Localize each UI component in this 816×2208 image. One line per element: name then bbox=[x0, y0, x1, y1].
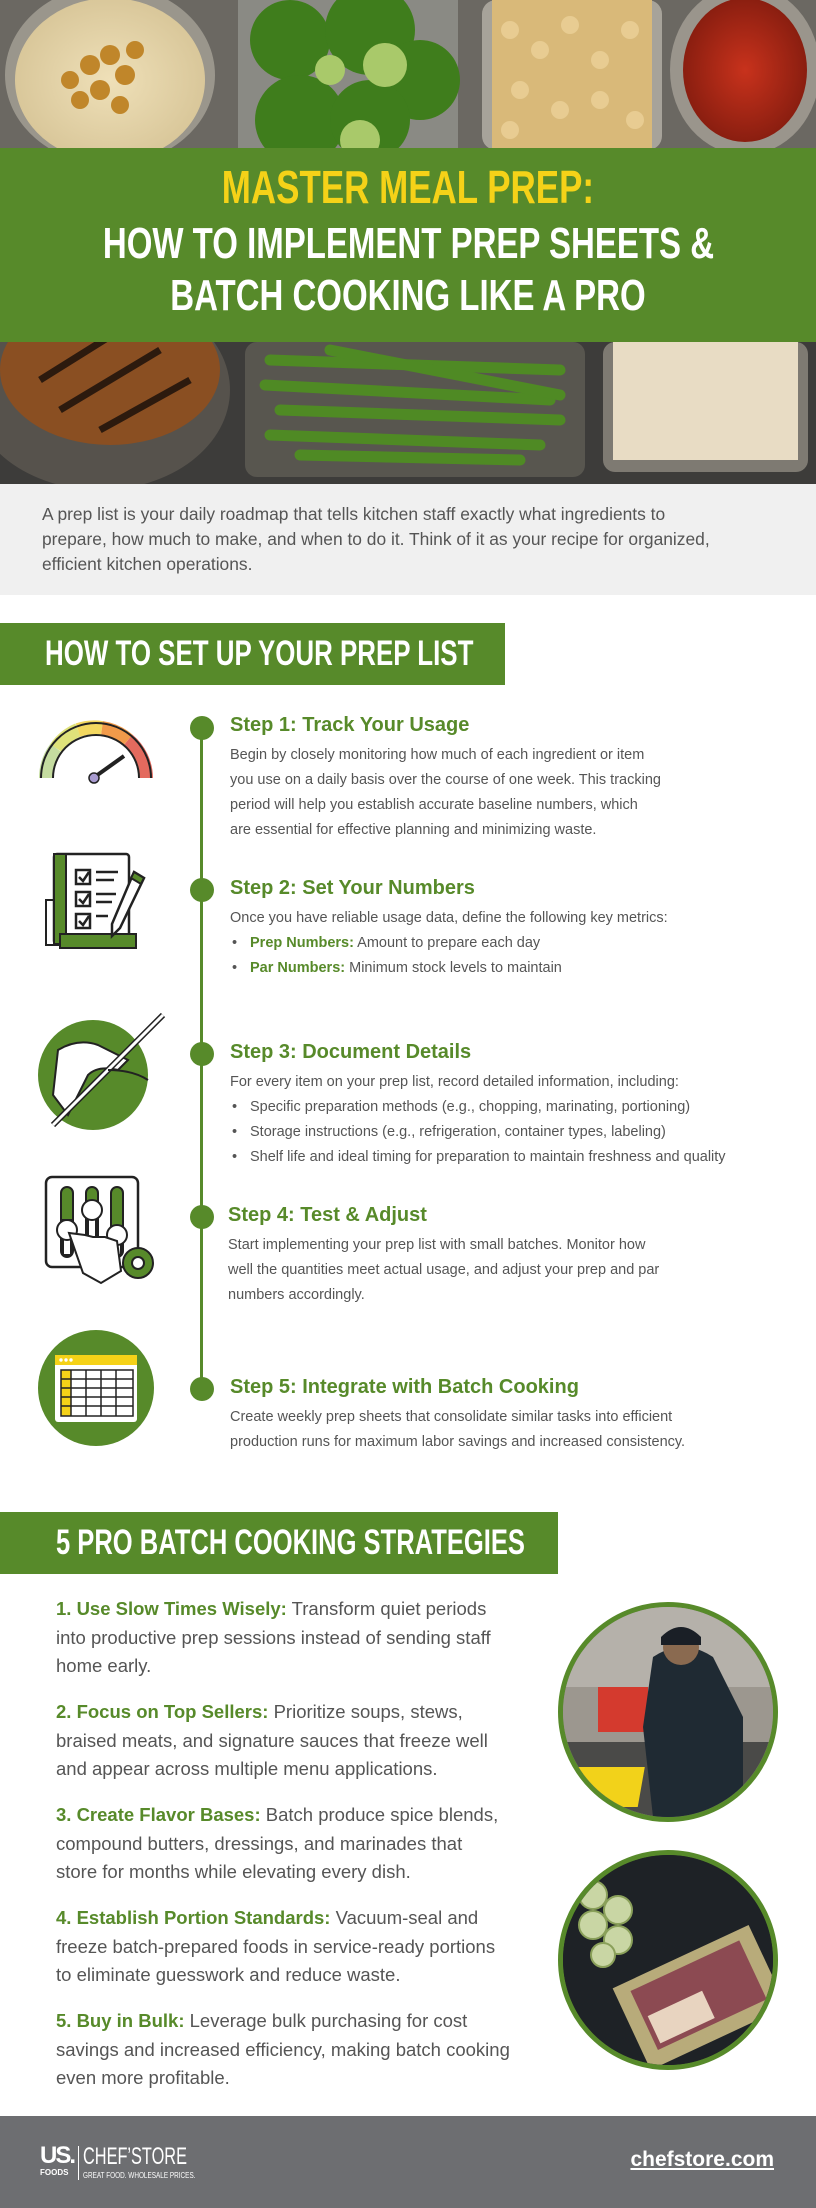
icon: checklist bbox=[45, 852, 146, 949]
hero photo bbox=[0, 0, 816, 484]
strategy 5: even more profitable. bbox=[56, 2067, 230, 2088]
step text: period will help you establish accurate baseline numbers, which bbox=[230, 797, 638, 813]
step text: Shelf life and ideal timing for preparation to maintain freshness and quality bbox=[250, 1149, 726, 1165]
timeline dot bbox=[190, 1205, 214, 1229]
strategy 4 bbox=[56, 1907, 495, 1985]
intro text box: A prep list is your daily roadmap that tells kitchen staff exactly what ingredients to bbox=[42, 504, 665, 524]
step text bbox=[230, 714, 661, 838]
step 5 bbox=[38, 1330, 685, 1450]
strategy 2 bbox=[56, 1701, 488, 1779]
title line white: HOW TO IMPLEMENT PREP SHEETS & bbox=[102, 219, 714, 268]
timeline line bbox=[200, 727, 203, 1388]
step 3 bbox=[38, 1012, 726, 1165]
title band bbox=[0, 148, 816, 342]
step text: Prep Numbers: Amount to prepare each day bbox=[250, 935, 540, 951]
strategies list bbox=[56, 1598, 510, 2088]
photo: chef bbox=[558, 1602, 778, 1822]
title line yellow: MASTER MEAL PREP: bbox=[222, 161, 594, 213]
step text: Storage instructions (e.g., refrigeration, container types, labeling) bbox=[250, 1124, 666, 1140]
step text: For every item on your prep list, record detailed information, including: bbox=[230, 1074, 679, 1090]
strategy 1: home early. bbox=[56, 1655, 151, 1676]
icon: hand writing bbox=[38, 1012, 166, 1130]
step text: well the quantities meet actual usage, and adjust your prep and par bbox=[228, 1262, 659, 1278]
logo: CHEF’STORE bbox=[83, 2143, 187, 2170]
step 4 bbox=[44, 1176, 659, 1303]
step text: you use on a daily basis over the course of one week. This tracking bbox=[230, 772, 661, 788]
strategy 5: 5. Buy in Bulk: Leverage bulk purchasing for cost bbox=[56, 2010, 467, 2031]
strategy 2: braised meats, and signature sauces that freeze well bbox=[56, 1730, 488, 1750]
strategy 5: savings and increased efficiency, making batch cooking bbox=[56, 2038, 510, 2060]
logo: FOODS bbox=[40, 2168, 68, 2177]
section header: strategies: 5 PRO BATCH COOKING STRATEGIES bbox=[56, 1523, 525, 1562]
step text: Step 1: Track Your Usage bbox=[230, 714, 469, 736]
logo bbox=[40, 2142, 196, 2180]
strategy 1 bbox=[56, 1598, 491, 1676]
intro text box bbox=[0, 484, 816, 595]
strategy 2: and appear across multiple menu applications. bbox=[56, 1758, 438, 1779]
icon: spreadsheet bbox=[38, 1330, 154, 1446]
section header: strategies bbox=[0, 1512, 558, 1574]
step text: Step 2: Set Your Numbers bbox=[230, 877, 475, 899]
logo: US. bbox=[40, 2142, 74, 2169]
step text: Par Numbers: Minimum stock levels to maintain bbox=[250, 960, 562, 976]
step 2 bbox=[45, 852, 668, 976]
step text: Begin by closely monitoring how much of each ingredient or item bbox=[230, 747, 644, 763]
strategy 4: 4. Establish Portion Standards: Vacuum-seal and bbox=[56, 1907, 478, 1928]
strategy 3: store for months while elevating every dish. bbox=[56, 1861, 411, 1882]
step text: Step 5: Integrate with Batch Cooking bbox=[230, 1376, 579, 1398]
step text: Specific preparation methods (e.g., chopping, marinating, portioning) bbox=[250, 1099, 690, 1115]
step text: are essential for effective planning and minimizing waste. bbox=[230, 822, 596, 838]
step text: Step 4: Test & Adjust bbox=[228, 1204, 427, 1226]
icon: gauge bbox=[39, 720, 153, 784]
step text: Start implementing your prep list with small batches. Monitor how bbox=[228, 1237, 645, 1253]
strategy 4: freeze batch-prepared foods in service-ready portions bbox=[56, 1936, 495, 1956]
strategy 3: 3. Create Flavor Bases: Batch produce spice blends, bbox=[56, 1804, 498, 1825]
strategy 1: into productive prep sessions instead of sending staff bbox=[56, 1626, 491, 1648]
logo: GREAT FOOD. WHOLESALE PRICES. bbox=[83, 2171, 196, 2180]
icon: sliders with hand bbox=[44, 1176, 154, 1284]
title line white bbox=[102, 219, 714, 320]
step text bbox=[230, 877, 668, 976]
step text bbox=[230, 1376, 685, 1450]
section header: prep list: HOW TO SET UP YOUR PREP LIST bbox=[45, 634, 473, 673]
strategy 2: 2. Focus on Top Sellers: Prioritize soups, stews, bbox=[56, 1701, 463, 1722]
website link: chefstore.com bbox=[630, 2148, 774, 2171]
step text bbox=[228, 1204, 659, 1303]
title line white: BATCH COOKING LIKE A PRO bbox=[170, 271, 646, 320]
timeline dot bbox=[190, 878, 214, 902]
step text: numbers accordingly. bbox=[228, 1287, 365, 1303]
step text: Step 3: Document Details bbox=[230, 1041, 471, 1063]
step 1 bbox=[39, 714, 661, 838]
strategy 1: 1. Use Slow Times Wisely: Transform quiet periods bbox=[56, 1598, 486, 1619]
step text: Once you have reliable usage data, define the following key metrics: bbox=[230, 910, 668, 926]
footer bbox=[0, 2116, 816, 2208]
step text bbox=[230, 1041, 726, 1165]
strategy 3 bbox=[56, 1804, 498, 1882]
intro text box: efficient kitchen operations. bbox=[42, 554, 252, 574]
section header: prep list bbox=[0, 623, 505, 685]
step text: production runs for maximum labor savings and increased consistency. bbox=[230, 1434, 685, 1450]
strategy 4: to eliminate guesswork and reduce waste. bbox=[56, 1964, 400, 1985]
timeline dot bbox=[190, 716, 214, 740]
strategy 3: compound butters, dressings, and marinades that bbox=[56, 1832, 462, 1854]
photo: vacuum-sealed meat bbox=[558, 1850, 778, 2070]
step text: Create weekly prep sheets that consolidate similar tasks into efficient bbox=[230, 1409, 672, 1425]
timeline dot bbox=[190, 1377, 214, 1401]
timeline dot bbox=[190, 1042, 214, 1066]
strategy 5 bbox=[56, 2010, 510, 2088]
intro text box: prepare, how much to make, and when to do it. Think of it as your recipe for organized, bbox=[42, 529, 710, 549]
